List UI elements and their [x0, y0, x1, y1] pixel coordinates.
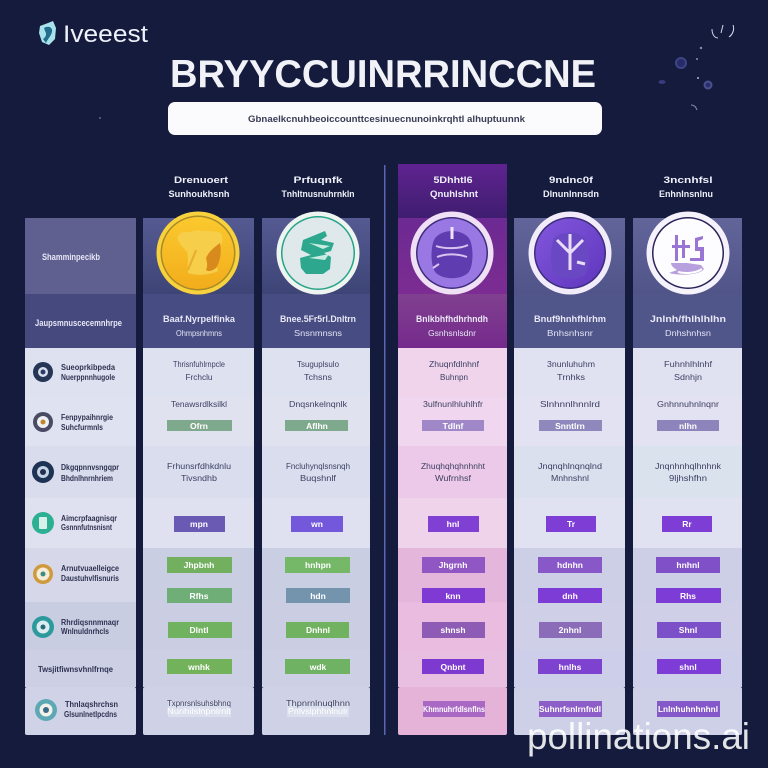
row values: Tchsns — [304, 372, 332, 382]
row values: Zhuqhqhqhnhnht — [421, 461, 486, 471]
status pills: Suhnrfsnlrnfndl — [539, 704, 601, 714]
status pills: shnsh — [440, 625, 466, 635]
status pills: Dlntl — [190, 625, 208, 635]
row values: Frhunsrfdhkdnlu — [167, 461, 231, 471]
status pills — [422, 420, 485, 717]
row label 5: Arnutvuaelleigce — [61, 564, 119, 573]
column: row labels — [25, 218, 136, 735]
row label 4 — [32, 512, 117, 534]
row values: Frchclu — [186, 372, 213, 382]
row values — [655, 359, 722, 483]
icon: teal coin — [276, 212, 360, 294]
description — [163, 314, 236, 338]
description: Jnlnh/fhlhlhlhn — [650, 314, 726, 325]
row values: Trnhks — [557, 372, 585, 382]
column 4: violet — [514, 175, 625, 735]
column heading: Tnhltnusnuhrnkln — [282, 189, 355, 200]
logo wordmark: Iveeest — [63, 21, 148, 48]
network text — [167, 698, 232, 717]
highlighted heading — [398, 164, 507, 218]
description: Bnuf9hnhfhlrhm — [534, 314, 606, 325]
status pills: nlhn — [679, 421, 697, 431]
row label 3 — [32, 461, 119, 483]
network text: Txpnrsnlsuhsbhnq — [167, 698, 231, 708]
row values: Zhuqnfdlnhnf — [429, 359, 480, 369]
status pills: Tr — [567, 519, 576, 529]
row values — [286, 359, 350, 483]
watermark: pollinations.ai — [527, 716, 750, 757]
status pills: Rhs — [680, 591, 696, 601]
icon: white coin — [646, 212, 730, 294]
status pills: Khmnuhrfdlsnflns — [423, 704, 485, 714]
status pills: hnhpn — [305, 560, 331, 570]
status pills: Dnhnl — [306, 625, 330, 635]
column heading: Sunhoukhsnh — [168, 189, 230, 200]
network text: Nunhilslnpnlrnlt — [167, 706, 232, 716]
column heading: Drenuoert — [174, 175, 229, 186]
subtitle banner: Gbnaelkcnuhbeoiccounttcesinuecnunoinkrqhtl alhuptuunnk — [248, 114, 526, 124]
column heading — [168, 175, 230, 200]
row values: Thrisnfuhlrnpcle — [173, 359, 225, 369]
status pills: 2nhnl — [559, 625, 581, 635]
network text: Thpnrnlnuqlhnn — [286, 698, 350, 708]
status pills: wnhk — [187, 662, 210, 672]
column heading — [659, 175, 713, 200]
row values — [538, 359, 602, 483]
row label 3: Dkgqpnnvsngqpr — [61, 463, 119, 472]
status pills: mpn — [190, 519, 208, 529]
column 5: white coin — [633, 175, 742, 735]
icon: violet coin — [528, 212, 612, 294]
vertical divider — [384, 165, 386, 735]
row values: 3nunluhuhm — [547, 359, 595, 369]
status pills — [538, 420, 602, 717]
row label 5: Daustuhvlfisnuris — [61, 574, 119, 583]
description: Gsnhsnlsdnr — [428, 328, 476, 338]
row values: Mnhnshnl — [551, 473, 589, 483]
status pills: hnhnl — [676, 560, 700, 570]
status pills: Jhpbnh — [184, 560, 214, 570]
row values: Buqshnlf — [300, 473, 337, 483]
description: Snsnmnsns — [294, 328, 342, 338]
network text: Pnlvslphhnlnulr — [288, 706, 348, 716]
status pills — [285, 420, 350, 674]
subtitle banner — [168, 102, 602, 135]
row label 3: Bhdnlhnrnhriem — [61, 474, 113, 483]
row label 7: Twsjitfiwnsvhnlfrnqe — [38, 665, 114, 674]
row values: Jnqnqhlnqnqlnd — [538, 461, 602, 471]
row label 8: Glsunlnetlpcdns — [64, 710, 117, 719]
column heading: 9ndnc0f — [549, 175, 594, 186]
description — [534, 314, 606, 338]
decorative particles — [99, 25, 734, 119]
row values: Gnhnnuhnlnqnr — [657, 399, 719, 409]
column heading: Dlnunlnnsdn — [543, 189, 599, 200]
column heading: Enhnlnsnlnu — [659, 189, 713, 200]
row values: 3ulfnunlhluhlhfr — [423, 399, 483, 409]
row values: Sdnhjn — [674, 372, 702, 382]
row values: Wufrnhsf — [435, 473, 472, 483]
row label 2: Fenpypaihnrgie — [61, 413, 113, 422]
status pills: Tdlnf — [443, 421, 464, 431]
status pills — [167, 420, 232, 674]
description — [650, 314, 726, 338]
row values: Tenawsrdlksilkl — [171, 399, 227, 409]
status pills: Lnlnhuhnhnhnl — [658, 704, 718, 714]
row values: Fncluhynqlsnsnqh — [286, 461, 350, 471]
description: Ohmpsnhmns — [176, 328, 222, 338]
network text — [286, 698, 350, 717]
description: Baaf.Nyrpelfinka — [163, 314, 236, 325]
status pills: shnl — [679, 662, 697, 672]
row values: Buhnpn — [440, 372, 468, 382]
row label 6 — [32, 616, 119, 638]
highlighted heading: 5Dhhtl6 — [434, 175, 472, 186]
status pills: knn — [445, 591, 461, 601]
status pills: hdn — [310, 591, 326, 601]
column heading: 3ncnhfsl — [664, 175, 712, 186]
column 1: gold — [143, 175, 254, 735]
row values: Fuhnhlhlnhf — [664, 359, 713, 369]
status pills: Rr — [682, 519, 692, 529]
description — [280, 314, 356, 338]
description: Bnlkbhfhdhrhndh — [416, 314, 488, 325]
column heading — [543, 175, 599, 200]
row label 5 — [33, 564, 119, 584]
row values: Dnqsnkelnqnlk — [289, 399, 348, 409]
description: Bnhsnhsnr — [547, 328, 593, 338]
row label 1: Nuerppnnhugole — [61, 373, 115, 382]
status pills: Snntlrn — [555, 421, 585, 431]
row values: Tivsndhb — [181, 473, 217, 483]
row values: 9ljhshfhn — [669, 473, 707, 483]
status pills: hnl — [447, 519, 459, 529]
status pills: Aflhn — [306, 421, 328, 431]
row values — [421, 359, 486, 483]
title: BRYYCCUINRRINCCNE — [170, 53, 596, 96]
status pills: wn — [310, 519, 323, 529]
status pills: Rfhs — [190, 591, 209, 601]
logo — [39, 21, 148, 48]
row values — [167, 359, 231, 483]
row label 6: Wnlnuldnrhcls — [61, 627, 109, 636]
row label 1 — [33, 362, 116, 382]
description — [416, 314, 488, 338]
column 2: teal — [262, 175, 370, 735]
row label 8: Thnlaqshrchsn — [65, 700, 118, 709]
status pills: Qnbnt — [440, 662, 466, 672]
status pills: wdk — [309, 662, 327, 672]
row values: Jnqnhnhqlhnhnk — [655, 461, 722, 471]
status pills: hdnhn — [557, 560, 583, 570]
icon: logo mark — [39, 21, 56, 45]
column heading — [282, 175, 355, 200]
row label 2 — [33, 412, 113, 432]
row label 1: Sueoprkibpeda — [61, 363, 116, 372]
status pills: Ofrn — [190, 421, 208, 431]
row label 4: Gsnnnfutnsnisnt — [61, 523, 112, 532]
status pills: dnh — [562, 591, 578, 601]
column 3: highlighted purple — [398, 164, 507, 735]
row values: Tsuguplsulo — [297, 359, 339, 369]
icon: gold coin — [156, 212, 240, 294]
label: coin: Shamminpecikb — [42, 252, 100, 262]
status pills: Jhgrnh — [439, 560, 467, 570]
status pills — [656, 420, 721, 717]
label: description: Jaupsmnuscecemnhrpe — [35, 318, 122, 328]
row label 8 — [35, 699, 118, 721]
status pills: Shnl — [679, 625, 697, 635]
description: Dnhshnhsn — [665, 328, 711, 338]
row label 4: Aimcrpfaagnisqr — [61, 514, 117, 523]
row values: Slnhnnlhnnlrd — [540, 399, 600, 409]
description: Bnee.5Fr5rl.Dnltrn — [280, 314, 356, 325]
row label 6: Rhrdiqsnnmnaqr — [61, 618, 119, 627]
status pills: hnlhs — [559, 662, 582, 672]
icon: purple coin — [410, 212, 494, 294]
column heading: Prfuqnfk — [294, 175, 343, 186]
row label 2: Suhcfurmnls — [61, 423, 103, 432]
highlighted heading: Qnuhlshnt — [430, 189, 479, 200]
